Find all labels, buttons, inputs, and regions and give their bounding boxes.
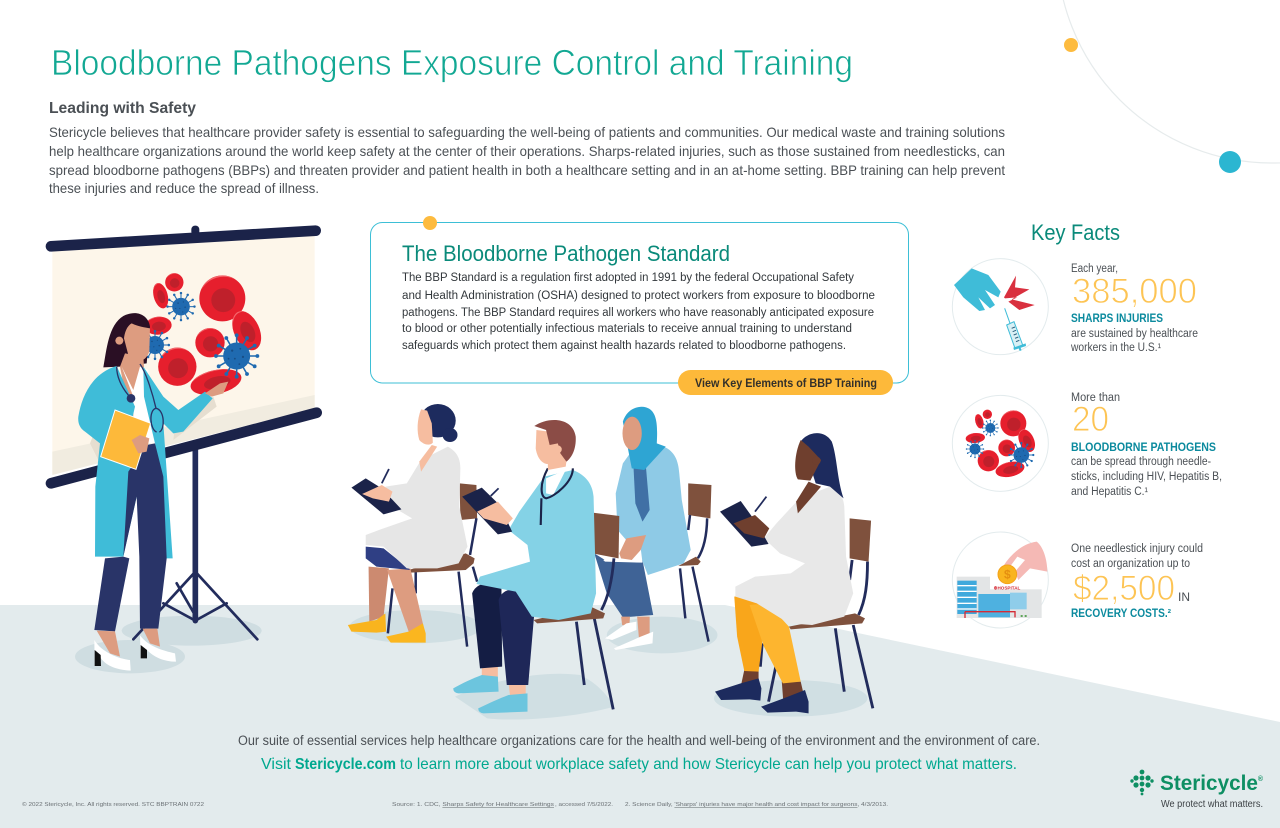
logo tagline: We protect what matters. [1161,799,1263,810]
key fact: recovery costs: IN [1178,592,1190,604]
screen bottom bar [51,413,317,483]
illustration: seated trainees [348,404,873,720]
icon: hospital and coin [952,532,1048,628]
panel frame [370,222,908,383]
button: view key elements [678,370,893,395]
presenter doctor [78,313,228,671]
panel body text: to blood or other potentially infectious materials to receive annual training to understand [402,323,852,335]
screen knob [191,226,199,236]
trainee: white coat, navy skirt [348,404,482,647]
call to action: to learn more about workplace safety and how Stericycle can help you protect what matters. [400,756,1017,773]
call to action: Stericycle.com [295,756,396,773]
key fact icons [952,259,1048,628]
title: Bloodborne Pathogens Exposure Control and Training [51,42,853,83]
sources [392,802,889,808]
intro paragraph [49,124,1005,196]
key fact: sharps injuries: Each year, [1071,263,1118,275]
heading: key facts: Key Facts [1031,220,1120,245]
logo wordmark: Stericycle [1160,772,1259,795]
intro paragraph: help healthcare organizations around the world keep safety at the center of their operations. Sharps-related injuries, such as those sustained from needlesticks, can [49,143,1005,159]
key fact: bloodborne pathogens: More than [1071,392,1120,404]
key fact: recovery costs: cost an organization up to [1071,558,1190,570]
panel body text: The BBP Standard is a regulation first adopted in 1991 by the federal Occupational Safety [402,272,854,284]
screen lower band [52,395,315,475]
stericycle logo [1130,770,1264,810]
sources: , accessed 7/5/2022. [555,802,614,808]
panel: bloodborne pathogen standard [370,216,908,395]
button: view key elements: View Key Elements of BBP Training [695,376,877,390]
key fact: recovery costs [1071,543,1203,620]
key fact: recovery costs: RECOVERY COSTS.² [1071,608,1171,620]
icon: hospital and coin: ⊕HOSPITAL [994,585,1020,591]
trainee: blue coat with stethoscope [453,420,619,720]
panel dot [423,216,437,230]
call to action: Visit [261,756,292,773]
icon: hand and syringe [952,259,1048,355]
key fact: recovery costs: One needlestick injury could [1071,543,1203,555]
tripod stand [133,443,257,639]
icon: blood cells [952,395,1048,491]
sources: Source: 1. CDC, Sharps Safety for Healthcare Settings [392,802,554,808]
key fact: bloodborne pathogens: and Hepatitis C.¹ [1071,486,1148,498]
key fact: sharps injuries: workers in the U.S.¹ [1070,342,1161,354]
panel body text: pathogens. The BBP Standard requires all workers who have reasonably anticipated exposure [402,307,874,319]
blood cells and viruses [140,273,267,399]
key fact: bloodborne pathogens: BLOODBORNE PATHOGENS [1071,442,1216,454]
copyright: © 2022 Stericycle, Inc. All rights reserved. STC BBPTRAIN 0722 [22,801,204,808]
key fact: bloodborne pathogens: 20 [1072,400,1109,439]
key fact: bloodborne pathogens [1071,392,1222,498]
panel body text: safeguards which protect them against health hazards related to bloodborne pathogens. [402,340,846,352]
key fact: sharps injuries [1070,263,1198,354]
intro paragraph: these injuries and reduce the spread of illness. [49,180,319,196]
screen top bar [51,231,316,246]
logo wordmark: ® [1258,775,1264,783]
key fact: bloodborne pathogens: can be spread through needle- [1071,456,1211,468]
background floor [0,605,1280,828]
panel body text: and Health Administration (OSHA) designed to protect workers from exposure to bloodborne [402,290,875,302]
logo mark [1130,770,1154,795]
intro paragraph: Stericycle believes that healthcare provider safety is essential to safeguarding the well-being of patients and communities. Our medical waste and training solutions [49,124,1005,140]
key fact: bloodborne pathogens: sticks, including HIV, Hepatitis B, [1071,471,1222,483]
illustration: presenter and projection screen [51,226,317,673]
key fact: sharps injuries: SHARPS INJURIES [1071,313,1163,325]
panel body text [402,272,875,352]
sources: 2. Science Daily, 'Sharps' injuries have major health and cost impact for surgeons , 4/3/2013. [625,802,889,808]
stand shadow [122,616,262,646]
key fact: sharps injuries: 385,000 [1072,272,1197,311]
presenter shadow [75,640,185,673]
screen surface [52,233,315,473]
trainee: hijab, back row [594,407,717,653]
presenter shadow on screen [90,397,217,463]
panel heading: The Bloodborne Pathogen Standard [402,241,730,266]
closing statement: Our suite of essential services help healthcare organizations care for the health and well-being of the environment and the environment of care. [238,733,1040,748]
key fact: recovery costs: $2,500 [1073,569,1175,608]
decorative arc with dots [1057,0,1280,173]
trainee: white coat, yellow leggings [714,433,873,717]
subheading: leading with safety: Leading with Safety [49,100,196,117]
icon: hospital and coin: $ [1004,568,1011,582]
key fact: sharps injuries: are sustained by healthcare [1071,328,1198,340]
intro paragraph: spread bloodborne pathogens (BBPs) and threaten provider and patient health in both a healthcare setting and in an at-home setting. BBP training can help prevent [49,162,1005,178]
